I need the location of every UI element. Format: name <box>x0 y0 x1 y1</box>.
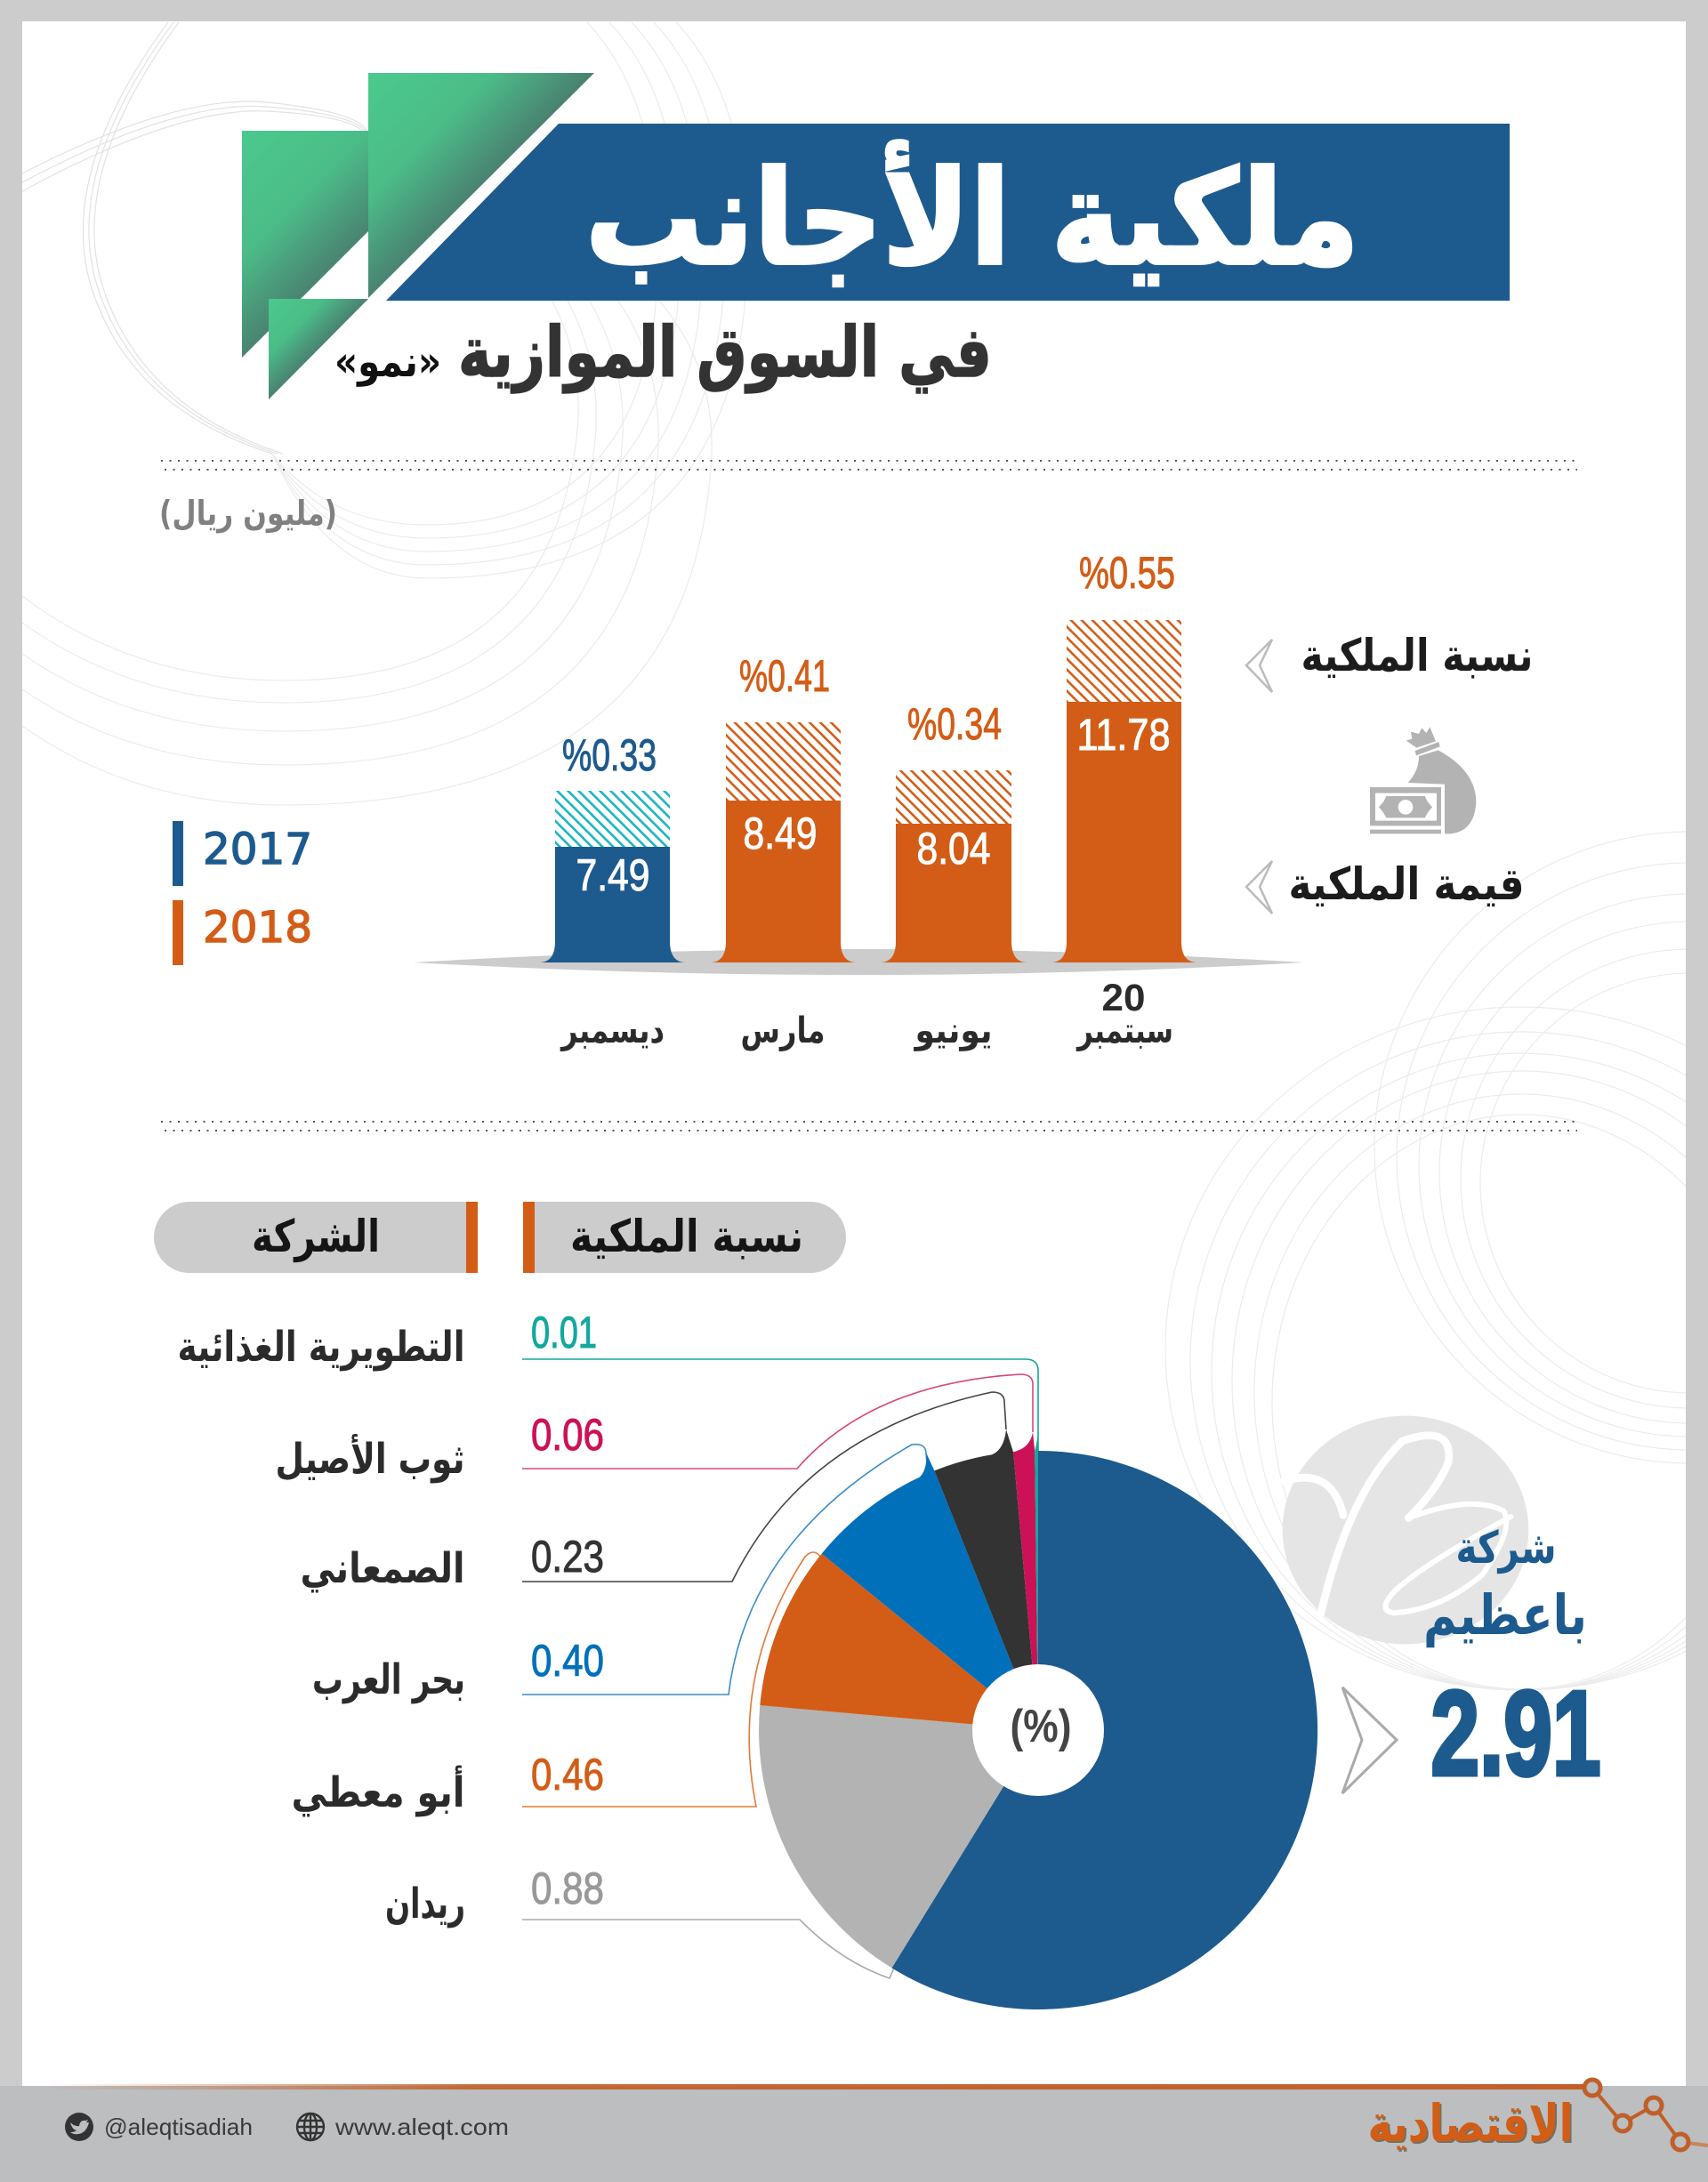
bar: September: %0.55 <box>1079 548 1175 598</box>
slice: Abu Moati 0.46 <box>760 1554 1038 1730</box>
panel: bar chart <box>414 548 1304 1051</box>
slice: Ba'azeem 2.91 <box>891 1451 1317 2009</box>
callout: largest holder <box>1423 1522 1601 1800</box>
bar: March: 8.49 <box>744 809 817 858</box>
month labels: يونيو <box>914 1010 993 1051</box>
company names: أبو معطي <box>292 1765 464 1817</box>
bar: September <box>1051 548 1197 962</box>
bar: June <box>880 699 1027 962</box>
pie centre: (%) <box>1011 1701 1071 1752</box>
icon: globe <box>297 2114 324 2140</box>
slice: Raydan 0.88 <box>759 1705 1038 1968</box>
leader lines <box>522 1359 1038 1978</box>
legend: ownership share: نسبة الملكية <box>1301 630 1534 681</box>
pie centre <box>972 1664 1104 1796</box>
icon: twitter <box>65 2113 93 2141</box>
ownership values: 0.06 <box>531 1410 604 1460</box>
ownership values: 0.23 <box>531 1532 604 1582</box>
bar: September: 11.78 <box>1076 710 1171 760</box>
slice: Bahr Al Arab 0.40 <box>822 1453 1038 1730</box>
month labels: سبتمبر <box>1076 1010 1173 1051</box>
bar: December <box>539 730 686 962</box>
panel: header <box>242 73 1510 399</box>
slice: Food Development 0.01 <box>1035 1432 1038 1730</box>
company names: ثوب الأصيل <box>276 1433 464 1484</box>
bar: March: %0.41 <box>739 651 830 701</box>
bar: June: 8.04 <box>916 824 991 874</box>
brand line graph <box>1584 2080 1708 2150</box>
slice: Thob Al Aseel 0.06 <box>1013 1432 1038 1730</box>
ownership values: 0.40 <box>531 1636 604 1686</box>
ownership values <box>531 1308 604 1913</box>
month labels <box>560 977 1173 1051</box>
panel: company table <box>154 1202 846 1928</box>
twitter handle: @aleqtisadiah <box>104 2114 253 2140</box>
legend: years: 2018 <box>203 903 312 953</box>
callout: largest holder: شركة <box>1455 1522 1557 1574</box>
ownership values: 0.46 <box>531 1750 604 1800</box>
month labels: 20 <box>1101 977 1146 1019</box>
company names: ريدان <box>385 1880 465 1928</box>
green triangle decoration <box>242 73 594 399</box>
icon: money bag <box>1370 727 1476 833</box>
subtitle tag: «نمو» <box>334 337 441 387</box>
legend: years <box>173 821 312 965</box>
panel: pie chart <box>522 1359 1317 2009</box>
bar: June: %0.34 <box>907 699 1002 749</box>
legend: years: 2017 <box>203 825 312 874</box>
panel: footer <box>0 2080 1708 2182</box>
unit label: (مليون ريال) <box>159 494 337 533</box>
ownership values: 0.01 <box>531 1308 597 1357</box>
ownership values: 0.88 <box>531 1864 604 1913</box>
title banner <box>386 124 1510 301</box>
bar: March <box>710 651 857 962</box>
brand logo text: الاقتصادية <box>1368 2093 1573 2154</box>
slice: Al Samaani 0.23 <box>934 1429 1038 1730</box>
arrow: to largest holder <box>1342 1687 1397 1793</box>
chart base shadow <box>414 949 1304 975</box>
bar: December: %0.33 <box>562 730 657 780</box>
header: ownership share: نسبة الملكية <box>570 1211 803 1262</box>
company names <box>178 1323 465 1928</box>
header: company: الشركة <box>252 1211 380 1263</box>
company names: بحر العرب <box>312 1655 465 1704</box>
legend: ownership value: قيمة الملكية <box>1288 858 1525 910</box>
header: company <box>154 1202 478 1273</box>
month labels: مارس <box>740 1010 826 1051</box>
month labels: ديسمبر <box>560 1010 665 1051</box>
logo watermark <box>1283 1416 1528 1644</box>
company names: الصمعاني <box>301 1544 464 1593</box>
callout: largest holder: 2.91 <box>1430 1666 1601 1800</box>
header: ownership share <box>523 1202 846 1273</box>
title: ملكية الأجانب <box>585 141 1359 294</box>
callout: largest holder: باعظيم <box>1423 1582 1587 1647</box>
website: www.aleqt.com <box>334 2114 509 2140</box>
bar: December: 7.49 <box>576 850 649 900</box>
subtitle: في السوق الموازية <box>458 313 992 393</box>
company names: التطويرية الغذائية <box>178 1323 464 1372</box>
legend: ownership share <box>1246 630 1534 692</box>
